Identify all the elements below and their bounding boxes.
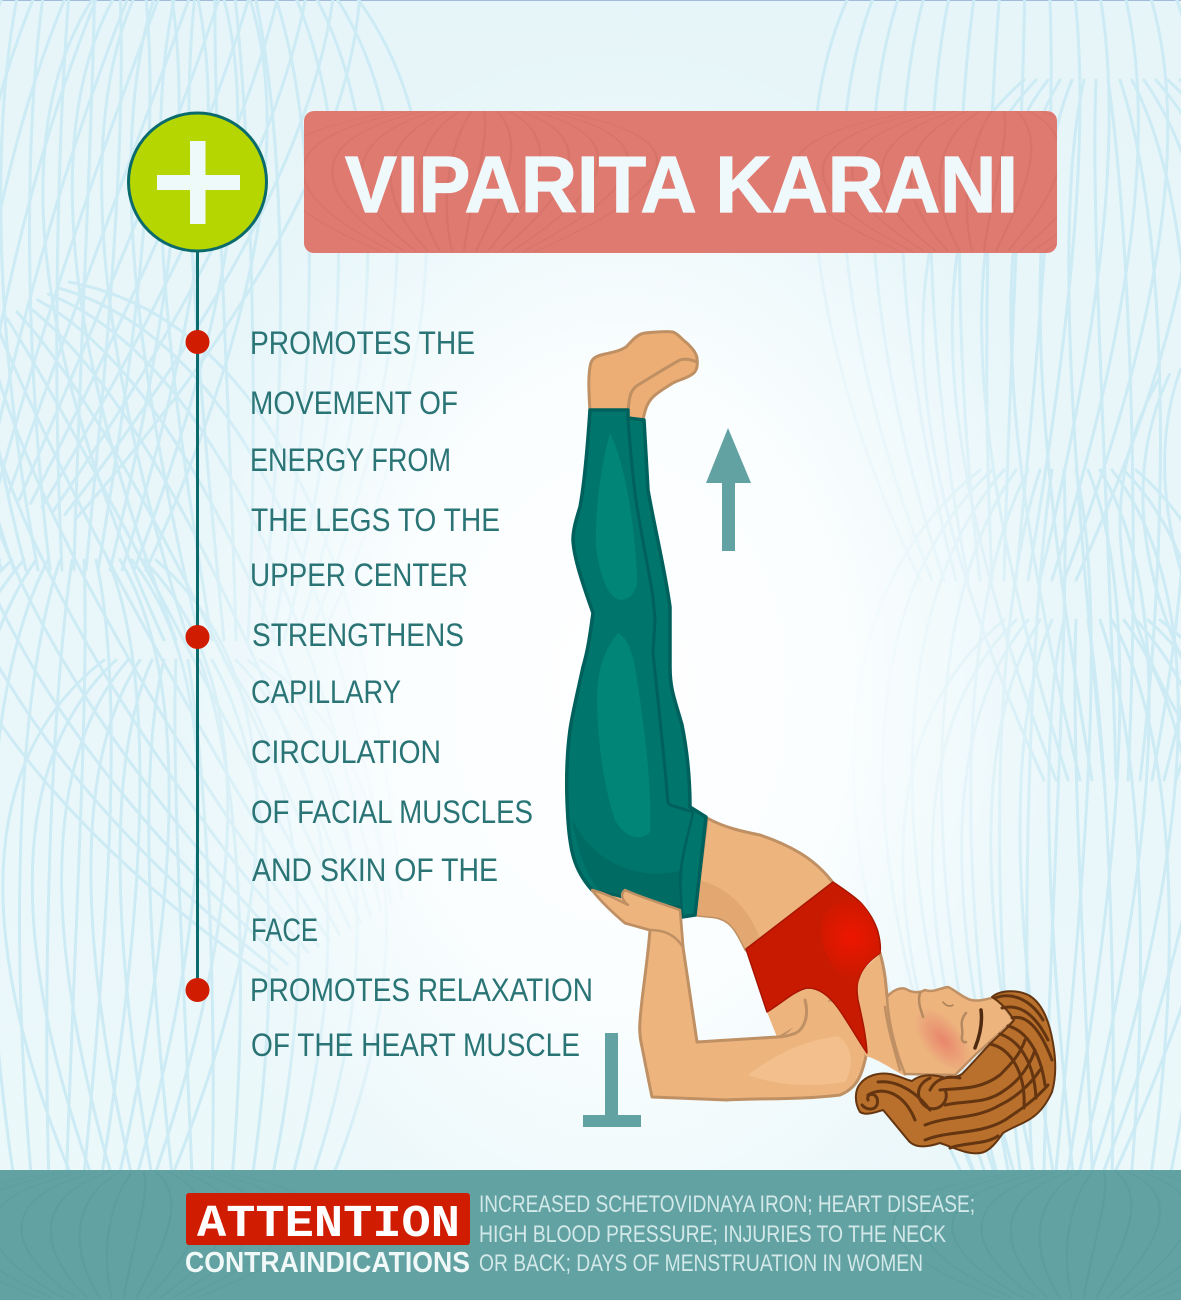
- benefit 2: STRENGTHENS: [252, 617, 464, 653]
- leg shadow: [572, 820, 683, 905]
- marker 3: [186, 978, 210, 1002]
- arm and shoulder: [592, 890, 866, 1100]
- nostril: [943, 1002, 953, 1006]
- chest and neck: [767, 953, 930, 1076]
- waistband seam: [680, 813, 693, 917]
- closed eye: [975, 1010, 982, 1048]
- bra cup: [822, 900, 880, 990]
- benefit 1: UPPER CENTER: [250, 557, 468, 593]
- feet: [589, 332, 697, 420]
- benefit 2: CAPILLARY: [251, 674, 401, 710]
- timeline with benefit markers: [186, 250, 210, 1002]
- contraindications list: OR BACK; DAYS OF MENSTRUATION IN WOMEN: [479, 1250, 923, 1277]
- benefit 2: OF FACIAL MUSCLES: [251, 794, 533, 830]
- torso: [695, 818, 834, 950]
- icon: grounding T mark: [583, 1033, 641, 1127]
- benefit 3: [250, 972, 593, 1063]
- contraindications band: [0, 1170, 1181, 1300]
- contraindications list: [479, 1191, 975, 1277]
- title banner: [304, 111, 1057, 253]
- title text: VIPARITA KARANI: [345, 140, 1018, 229]
- benefit 3: OF THE HEART MUSCLE: [251, 1027, 580, 1063]
- arrow: upward energy: [706, 428, 751, 551]
- leggings: [567, 410, 706, 917]
- marker 2: [186, 625, 210, 649]
- benefit 2: FACE: [251, 912, 318, 948]
- benefit 1: [250, 325, 500, 593]
- hair strands: [862, 996, 1052, 1148]
- nose: [962, 1013, 966, 1042]
- inner leg seam: [628, 420, 693, 812]
- benefit 1: MOVEMENT OF: [250, 385, 458, 421]
- yoga figure: [567, 332, 1055, 1153]
- upper leg highlight: [596, 433, 637, 600]
- benefit 2: CIRCULATION: [251, 734, 441, 770]
- arm highlight: [748, 1036, 851, 1085]
- benefit 1: ENERGY FROM: [250, 442, 451, 478]
- torso shade: [695, 880, 760, 950]
- contraindications list: INCREASED SCHETOVIDNAYA IRON; HEART DISEASE;: [479, 1191, 975, 1218]
- attention badge: ATTENTION: [197, 1199, 460, 1250]
- neck line: [885, 1007, 900, 1070]
- benefit 2: AND SKIN OF THE: [252, 852, 498, 888]
- cheek blush: [903, 998, 983, 1082]
- benefit 1: PROMOTES THE: [250, 325, 475, 361]
- icon: plus in green circle: [128, 113, 266, 251]
- marker 1: [186, 330, 210, 354]
- benefit 3: PROMOTES RELAXATION: [250, 972, 593, 1008]
- hair: [856, 991, 1055, 1153]
- head: [885, 987, 1014, 1082]
- benefits text: [250, 325, 593, 1063]
- mouth: [919, 993, 923, 1017]
- contraindications heading: CONTRAINDICATIONS: [185, 1247, 470, 1279]
- hand on thigh: [592, 890, 683, 947]
- benefit 1: THE LEGS TO THE: [251, 502, 500, 538]
- contraindications list: HIGH BLOOD PRESSURE; INJURIES TO THE NECK: [479, 1221, 947, 1248]
- lower leg highlight: [597, 633, 650, 837]
- red top: [746, 882, 880, 1053]
- benefit 2: [251, 617, 533, 948]
